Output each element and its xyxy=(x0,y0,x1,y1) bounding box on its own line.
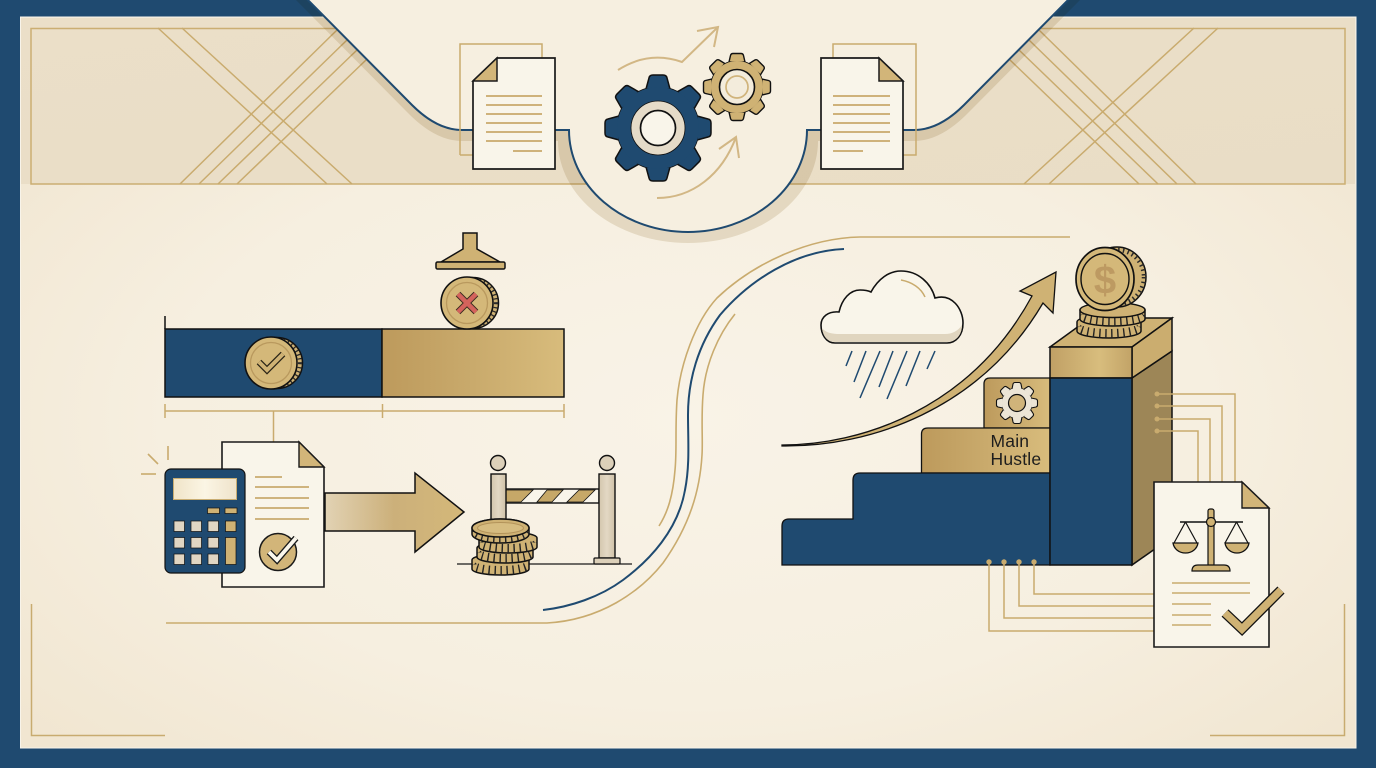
icon: large navy gear xyxy=(605,75,711,181)
icon: document with check xyxy=(222,442,324,587)
header notch shadow xyxy=(291,0,1085,243)
document icon top right xyxy=(821,44,916,169)
ruler under bar xyxy=(165,404,564,442)
header crossing lines right xyxy=(1010,28,1218,184)
step: main hustle block xyxy=(922,428,1050,473)
icon: legal document with scales xyxy=(1154,482,1269,647)
icon: rain cloud xyxy=(821,271,963,399)
step: gear block xyxy=(984,378,1050,428)
icon: coin with red cross xyxy=(441,277,498,329)
icon: calculator xyxy=(165,469,245,573)
arrow: growth curve xyxy=(782,272,1056,446)
connector lines: right of column xyxy=(1154,392,1235,482)
connector lines: below stairs xyxy=(986,559,1154,631)
corner bracket bottom right xyxy=(1210,604,1344,736)
icon: press stand xyxy=(436,233,505,269)
corner bracket bottom left xyxy=(32,604,165,736)
icon: coin with check xyxy=(245,337,302,389)
step: navy staircase xyxy=(782,473,1050,565)
curve: lower gold flow line xyxy=(166,314,735,623)
panel: split bar xyxy=(165,316,564,397)
scales of justice xyxy=(1173,509,1249,571)
step: main hustle block: Main xyxy=(990,431,1029,451)
header notch panel xyxy=(303,0,1073,232)
document icon top left xyxy=(460,44,555,169)
icon: coin stack xyxy=(472,519,537,575)
header band left and right xyxy=(21,18,1355,184)
icon: large check mark xyxy=(1225,590,1281,629)
curve: upper gold flow line xyxy=(659,237,1070,526)
step: main hustle block: Hustle xyxy=(990,449,1041,469)
icon: coin stack on column xyxy=(1077,302,1145,338)
icon: small gold gear xyxy=(704,54,770,120)
arrow: upper gear arrow xyxy=(618,27,718,70)
arrow: document to barrier xyxy=(325,473,464,552)
curve: navy flow line xyxy=(543,249,844,610)
icon: dollar coin xyxy=(1076,247,1146,310)
arrow: lower gear arrow xyxy=(657,137,739,198)
icon: dollar coin: $ xyxy=(1094,258,1116,302)
icon: calculator sparks xyxy=(141,446,168,474)
icon: barrier gate xyxy=(457,456,632,564)
header crossing lines left xyxy=(158,28,366,184)
step: column with gold cap xyxy=(1050,318,1172,565)
